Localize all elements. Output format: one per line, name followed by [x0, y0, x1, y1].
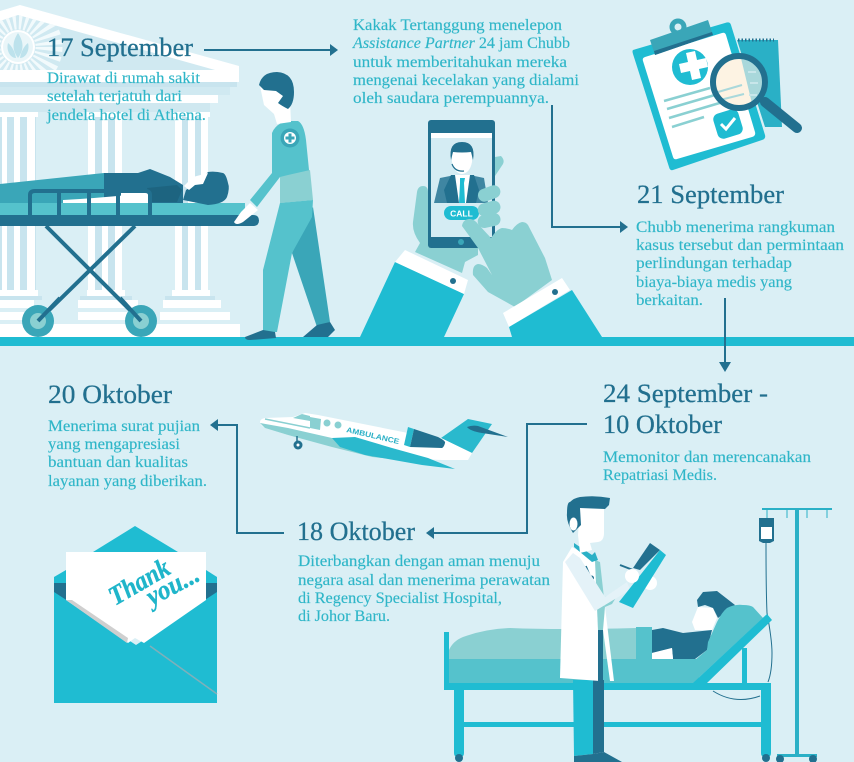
arrow: 24 September to 18 Oktober — [426, 424, 587, 539]
text block: 24 September — [603, 449, 811, 484]
illustration: doctor with clipboard — [560, 496, 666, 762]
text block: 20 Oktober — [48, 418, 207, 490]
text block: 18 Oktober: negara asal dan menerima perawatan — [298, 572, 550, 589]
arrow: call to 21 September — [552, 105, 628, 233]
arrow: 18 Oktober to 20 Oktober — [210, 419, 284, 533]
date: 20 Oktober: 20 Oktober — [48, 380, 172, 409]
text block: phone call: mengenai kecelakan yang dialami — [353, 72, 580, 89]
date: 24 September - 10 Oktober — [603, 379, 768, 439]
text block: 17 September — [46, 70, 206, 124]
date: 24 September - 10 Oktober: 24 September - — [603, 379, 768, 408]
text block: 18 Oktober — [298, 553, 550, 625]
illustration: nurse pushing the stretcher — [234, 72, 335, 340]
text block: 21 September: biaya-biaya medis yang — [636, 274, 792, 291]
text block: 21 September: berkaitan. — [636, 292, 703, 309]
plane label: AMBULANCE — [346, 425, 400, 446]
text block: phone call — [352, 17, 580, 107]
arrow: 21 September to 24 September — [719, 298, 731, 372]
card text: you... — [138, 559, 204, 613]
text block: 17 September: setelah terjatuh dari — [47, 88, 183, 105]
text block: 21 September: perlindungan terhadap — [636, 255, 792, 272]
text block: 18 Oktober: di Johor Baru. — [298, 608, 390, 625]
text block: 20 Oktober: bantuan dan kualitas — [48, 454, 188, 471]
text block: 17 September: jendela hotel di Athena. — [46, 107, 206, 124]
illustration: hands holding phone — [360, 120, 602, 337]
illustration: hospital bed with patient — [444, 591, 772, 762]
text block: 21 September: kasus tersebut dan permintaan — [636, 237, 844, 254]
illustration: IV stand — [713, 508, 832, 762]
text block: phone call: oleh saudara perempuannya. — [353, 90, 549, 107]
date: 24 September - 10 Oktober: 10 Oktober — [603, 410, 722, 439]
text block: 18 Oktober: di Regency Specialist Hospital, — [298, 590, 502, 607]
illustration: thank-you envelope — [54, 526, 217, 703]
text block: phone call: Assistance Partner 24 jam Chubb — [352, 35, 570, 52]
text block: phone call: Kakak Tertanggung menelepon — [353, 17, 562, 34]
text block: 21 September: Chubb menerima rangkuman — [636, 219, 835, 236]
text block: 20 Oktober: yang mengapresiasi — [48, 436, 181, 453]
illustration: clipboard and magnifier — [632, 18, 797, 170]
text block: 17 September: Dirawat di rumah sakit — [47, 70, 201, 87]
ground bar — [0, 337, 854, 346]
text block: 24 September: Memonitor dan merencanakan — [603, 449, 811, 466]
illustration: Greek temple — [0, 5, 240, 337]
text block: phone call: untuk memberitahukan mereka — [353, 54, 567, 71]
card text: Thank — [103, 552, 176, 611]
date: 18 Oktober: 18 Oktober — [297, 517, 415, 546]
text block: 20 Oktober: Menerima surat pujian — [48, 418, 200, 435]
call button label: CALL — [450, 208, 473, 218]
date: 21 September: 21 September — [637, 180, 784, 209]
text block: 24 September: Repatriasi Medis. — [603, 467, 717, 484]
date: 17 September: 17 September — [47, 33, 193, 62]
text block: 21 September — [636, 219, 844, 309]
arrow: 17 September to call — [204, 44, 338, 56]
text block: 20 Oktober: layanan yang diberikan. — [48, 473, 207, 490]
illustration: stretcher with patient — [0, 169, 259, 337]
text block: 18 Oktober: Diterbangkan dengan aman menuju — [298, 553, 540, 570]
illustration: ambulance plane — [260, 413, 508, 469]
